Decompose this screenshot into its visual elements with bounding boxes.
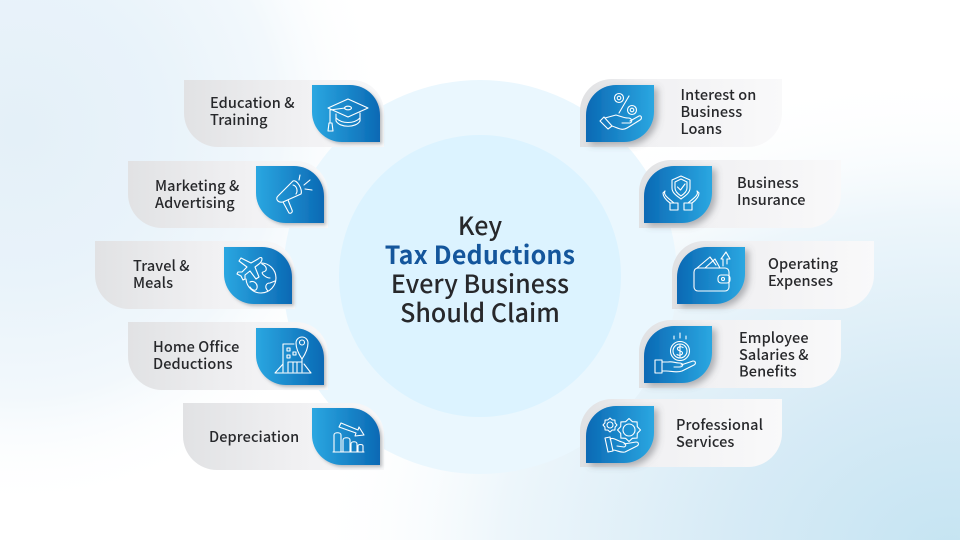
title: Should Claim <box>400 294 560 330</box>
text: Professional Services: Professional <box>676 414 763 435</box>
title: Every Business <box>391 265 569 301</box>
card: Travel & Meals <box>95 241 295 309</box>
card: Interest on Business Loans <box>580 79 782 147</box>
icon tile: wallet <box>677 247 745 304</box>
icon tile: falling chart <box>312 408 380 465</box>
icon tile: megaphone <box>256 166 324 223</box>
text: Interest on Business Loans: Business <box>680 101 742 122</box>
title <box>385 207 575 330</box>
inner centre circle <box>339 135 621 417</box>
text: Home Office Deductions: Deductions <box>153 353 233 374</box>
title: Tax Deductions <box>385 236 575 272</box>
text: Home Office Deductions: Home Office <box>153 336 239 357</box>
text: Marketing & Advertising: Advertising <box>155 192 235 213</box>
text: Travel & Meals: Travel & <box>133 255 190 276</box>
text: Operating Expenses: Operating <box>768 253 839 274</box>
icon tile: gears and hand <box>586 406 654 463</box>
text: Interest on Business Loans: Interest on <box>680 84 756 105</box>
card: Professional Services <box>580 399 782 467</box>
text: Business Insurance: Business <box>737 172 799 193</box>
text: Employee Salaries & Benefits: Salaries & <box>739 344 809 365</box>
card: Employee Salaries & Benefits <box>639 320 841 388</box>
icon tile: hand with coin <box>644 326 712 383</box>
card: Home Office Deductions <box>128 322 328 390</box>
icon tile: graduation cap <box>312 85 380 142</box>
icon tile: hands and shield <box>644 166 712 223</box>
text: Education & Training: Training <box>210 109 268 130</box>
text: Business Insurance: Insurance <box>737 189 806 210</box>
text: Professional Services: Services <box>676 431 734 452</box>
title: Key <box>458 207 502 243</box>
text: Interest on Business Loans: Loans <box>680 118 722 139</box>
text: Travel & Meals: Meals <box>133 272 173 293</box>
card: Depreciation <box>183 403 384 470</box>
icon tile: plane and globe <box>224 247 292 304</box>
text: Employee Salaries & Benefits: Benefits <box>739 360 797 382</box>
card: Marketing & Advertising <box>128 161 328 228</box>
outer centre circle <box>283 80 677 474</box>
text: Education & Training: Education & <box>210 92 295 113</box>
text: Employee Salaries & Benefits: Employee <box>739 327 809 348</box>
text: Depreciation: Depreciation <box>209 426 299 447</box>
text: Marketing & Advertising: Marketing & <box>155 175 239 196</box>
text: Operating Expenses: Expenses <box>768 270 833 291</box>
icon tile: building with pin <box>256 328 324 385</box>
card: Business Insurance <box>639 160 841 228</box>
icon tile: hand with percent <box>586 85 654 142</box>
card: Education & Training <box>184 80 384 147</box>
card: Operating Expenses <box>672 241 874 309</box>
